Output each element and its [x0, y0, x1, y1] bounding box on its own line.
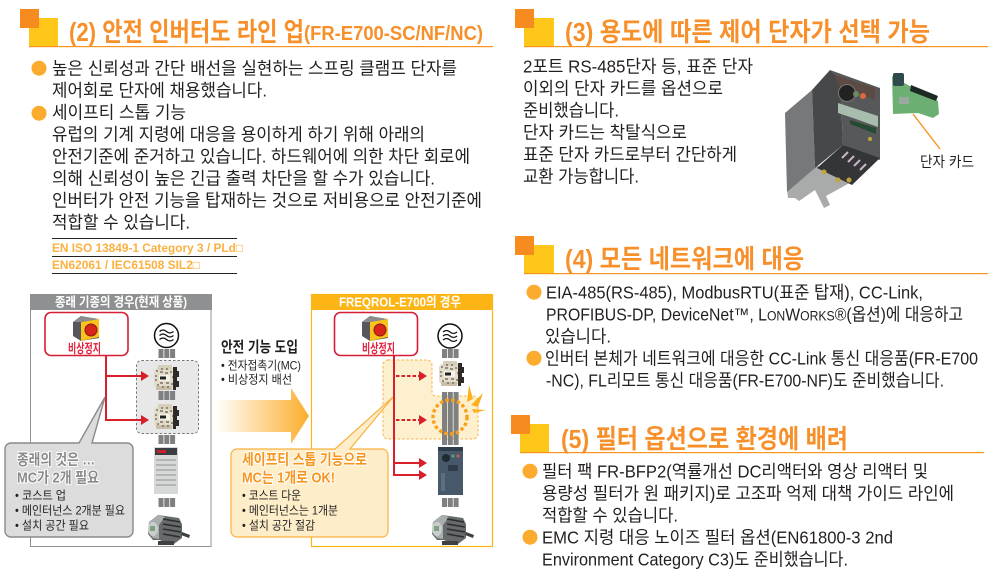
callout: one MC is enough: MC는 1개로 OK!	[242, 470, 335, 486]
section 3 body text: 단자 카드는 착탈식으로	[523, 123, 687, 143]
section 3 body text: 준비했습니다.	[523, 101, 619, 121]
inverter with terminal card	[785, 70, 880, 208]
section 2: safety inverter heading: (2) 안전 인버터도 라인 업	[69, 17, 304, 47]
safety function introduction note: • 비상정지 배선	[221, 372, 292, 386]
safety function introduction note: 안전 기능 도입	[221, 339, 298, 356]
contactor	[439, 361, 464, 386]
power source icon	[438, 324, 462, 348]
section 2 body text: 높은 신뢰성과 간단 배선을 실현하는 스프링 클램프 단자를	[52, 59, 457, 79]
section 4 body text: -NC), FL리모트 통신 대응품(FR-E700-NF)도 준비했습니다.	[546, 371, 944, 391]
leader line	[913, 114, 940, 149]
conventional inverter	[154, 447, 178, 494]
section 5: filter heading: (5) 필터 옵션으로 환경에 배려	[561, 424, 848, 454]
removed contactor marker	[433, 385, 486, 434]
section 5 body text: 적합할 수 있습니다.	[542, 506, 678, 526]
section 2: safety inverter heading: (FR-E700-SC/NF/NC)	[304, 23, 483, 45]
safety function introduction note	[221, 339, 301, 386]
motor	[432, 515, 474, 545]
motor	[148, 515, 190, 545]
section 5: filter heading	[511, 415, 984, 454]
section 2 body text: 세이프티 스톱 기능	[52, 103, 186, 123]
emergency stop box: 비상정지	[68, 341, 101, 356]
section 5 body text: 용량성 필터가 원 패키지)로 고조파 억제 대책 가이드 라인에	[542, 484, 954, 504]
callout: one MC is enough: • 설치 공간 절감	[242, 518, 315, 532]
section 3 body text: 교환 가능합니다.	[523, 167, 639, 187]
callout: one MC is enough: 세이프티 스톱 기능으로	[242, 452, 367, 468]
label: terminal card: 단자 카드	[920, 154, 974, 171]
safety standards list: EN ISO 13849-1 Category 3 / PLd□	[52, 241, 243, 255]
section 2 body text: 제어회로 단자에 채용했습니다.	[52, 81, 267, 101]
panel: conventional model: 종래 기종의 경우(현재 상품)	[55, 294, 187, 310]
callout: conventional requires two MCs: MC가 2개 필요	[17, 470, 99, 486]
callout: conventional requires two MCs	[5, 397, 133, 537]
power source icon	[154, 324, 178, 348]
red wiring arrows	[394, 356, 427, 480]
callout: conventional requires two MCs: • 설치 공간 필요	[15, 518, 89, 532]
connector bars	[442, 349, 459, 507]
FR-E700 inverter	[438, 447, 463, 495]
section 3 body text	[523, 57, 753, 187]
safety stop zone	[383, 360, 478, 439]
callout: one MC is enough	[231, 397, 393, 537]
section 2 body text: 안전기준에 준거하고 있습니다. 하드웨어에 의한 차단 회로에	[52, 147, 470, 167]
section 4: network heading	[515, 236, 988, 274]
section 5 body text: EMC 지령 대응 노이즈 필터 옵션(EN61800-3 2nd	[542, 528, 893, 548]
section 4 body text: EIA-485(RS-485), ModbusRTU(표준 탑재), CC-Link,	[546, 283, 923, 303]
callout: one MC is enough: • 코스트 다운	[242, 488, 301, 502]
callout: conventional requires two MCs: • 메인터넌스 2개분 필요	[15, 504, 125, 518]
section 5 body text: 필터 팩 FR-BFP2(역률개선 DC리액터와 영상 리액터 및	[542, 462, 928, 482]
section 3 body text: 표준 단자 카드로부터 간단하게	[523, 145, 737, 165]
section 3 body text: 2포트 RS-485단자 등, 표준 단자	[523, 57, 753, 77]
section 2 body text: 유럽의 기계 지령에 대응을 용이하게 하기 위해 아래의	[52, 125, 425, 145]
callout: conventional requires two MCs: • 코스트 업	[15, 488, 66, 502]
section 4 body text: 있습니다.	[545, 327, 611, 347]
connector bars	[158, 349, 175, 507]
section 3 body text: 이외의 단자 카드를 옵션으로	[523, 79, 723, 99]
callout: one MC is enough: • 메인터넌스는 1개분	[242, 504, 338, 518]
panel: FREQROL-E700: FREQROL-E700의 경우	[339, 294, 461, 310]
section 4 body text	[526, 283, 978, 391]
callout: conventional requires two MCs: 종래의 것은 …	[17, 452, 95, 468]
section 2 body text: 적합할 수 있습니다.	[52, 213, 190, 233]
section 3: terminal selection heading: (3) 용도에 따른 제어 단자가 선택 가능	[565, 17, 930, 47]
panel: conventional model	[5, 294, 212, 546]
emergency stop box: 비상정지	[362, 341, 395, 356]
terminal card part	[892, 73, 939, 118]
arrow: transition	[215, 388, 309, 444]
section 2 body text: 인버터가 안전 기능을 탑재하는 것으로 저비용으로 안전기준에	[52, 191, 482, 211]
section 2: safety inverter heading	[20, 9, 493, 47]
section 3: terminal selection heading	[515, 9, 988, 47]
section 5 body text	[522, 462, 954, 570]
safety function introduction note: • 전자접촉기(MC)	[221, 358, 301, 372]
section 4: network heading: (4) 모든 네트워크에 대응	[565, 244, 804, 274]
section 4 body text: PROFIBUS-DP, DeviceNet™, LONWORKS®(옵션)에 대응하고	[546, 305, 963, 325]
section 2 body text: 의해 신뢰성이 높은 긴급 출력 차단을 할 수가 있습니다.	[52, 169, 435, 189]
emergency stop box	[45, 312, 128, 356]
safety standards list	[52, 238, 243, 274]
section 5 body text: Environment Category C3)도 준비했습니다.	[542, 550, 848, 570]
emergency stop box	[334, 312, 418, 356]
red wiring arrows	[106, 356, 149, 425]
section 2 body text	[32, 59, 482, 233]
safety standards list: EN62061 / IEC61508 SIL2□	[52, 258, 200, 272]
contactor group	[136, 360, 198, 434]
panel: FREQROL-E700	[231, 294, 493, 546]
